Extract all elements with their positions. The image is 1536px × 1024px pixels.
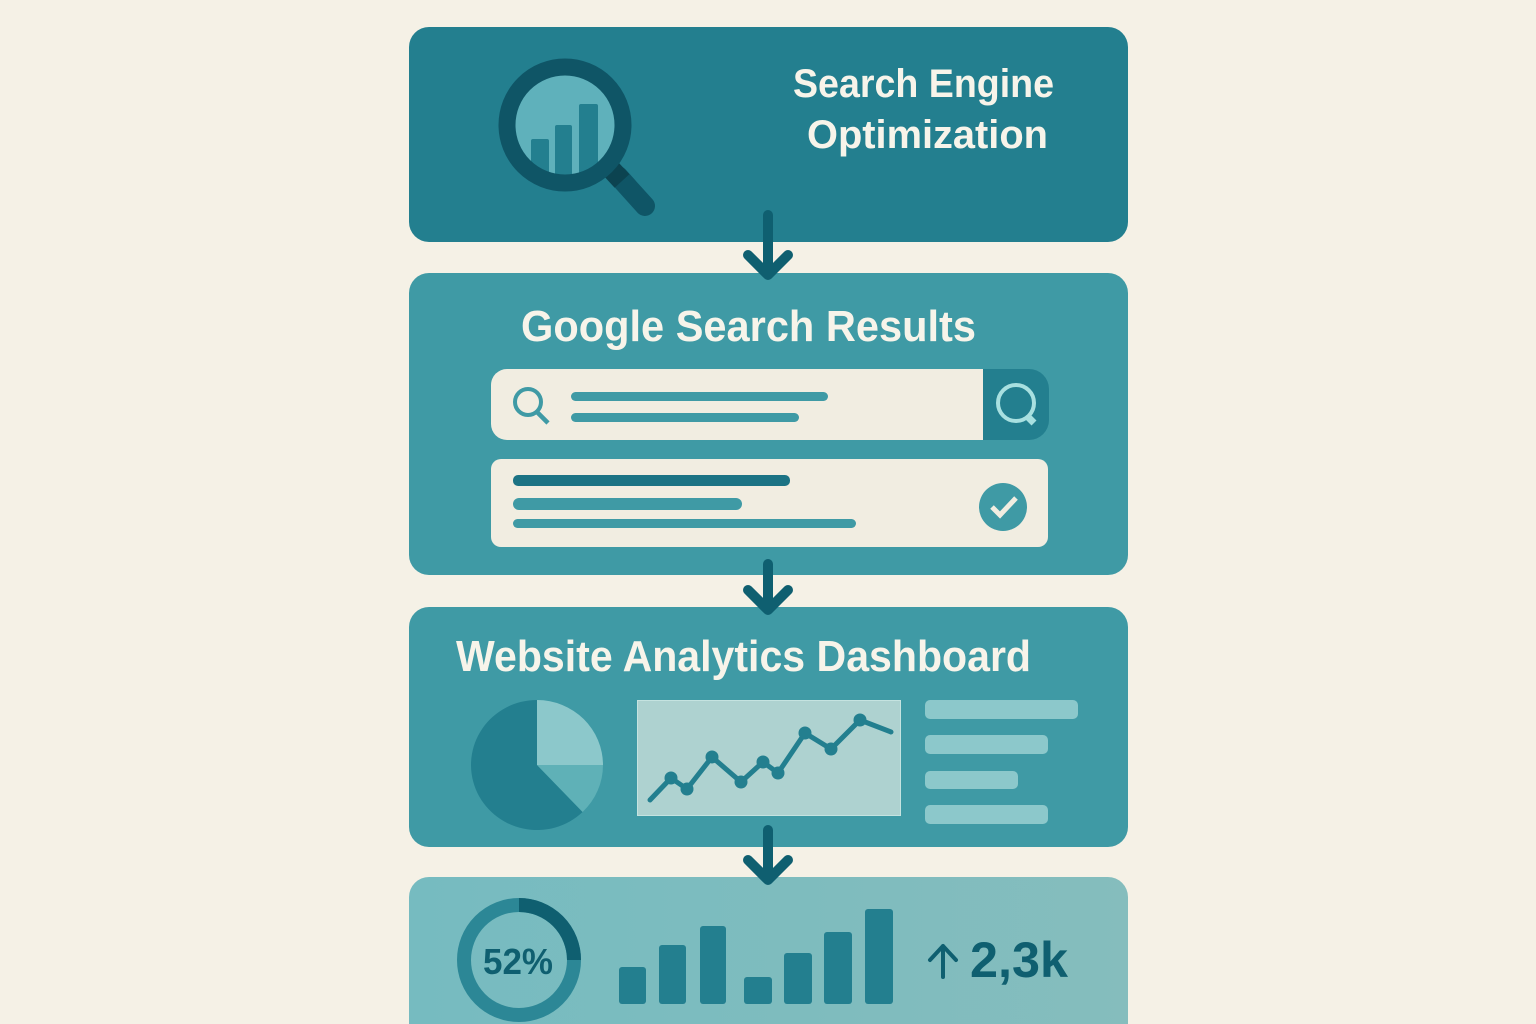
- search bar: [491, 369, 1049, 440]
- arrow: step 1 to 2: [748, 215, 788, 275]
- panel: key metrics: [409, 877, 1128, 1024]
- icon: magnifying glass with bars: [507, 67, 645, 206]
- bar chart: [619, 909, 893, 1004]
- panel: google search results: [409, 273, 1128, 575]
- heading: google search results: Google Search Results: [521, 302, 976, 351]
- panel: search engine optimization: [409, 27, 1128, 242]
- metric bars list: [925, 700, 1078, 824]
- donut: 52%: 52%: [483, 941, 553, 982]
- heading: website analytics dashboard: Website Analytics Dashboard: [456, 632, 1031, 681]
- donut: 52%: [464, 905, 574, 1015]
- pie chart: [471, 700, 603, 830]
- line chart: [638, 700, 900, 816]
- result card: [491, 459, 1048, 547]
- icon: up arrow: [930, 946, 956, 977]
- arrow: step 3 to 4: [748, 830, 788, 880]
- arrow: step 2 to 3: [748, 564, 788, 610]
- stat: 2,3k: 2,3k: [970, 932, 1068, 988]
- heading: search engine optimization: Optimization: [807, 113, 1048, 157]
- icon: check badge: [979, 483, 1027, 531]
- panel: website analytics dashboard: [409, 607, 1128, 847]
- icon: search button magnifier: [998, 385, 1034, 423]
- icon: small magnifier: [515, 389, 548, 423]
- heading: search engine optimization: Search Engine: [793, 62, 1054, 106]
